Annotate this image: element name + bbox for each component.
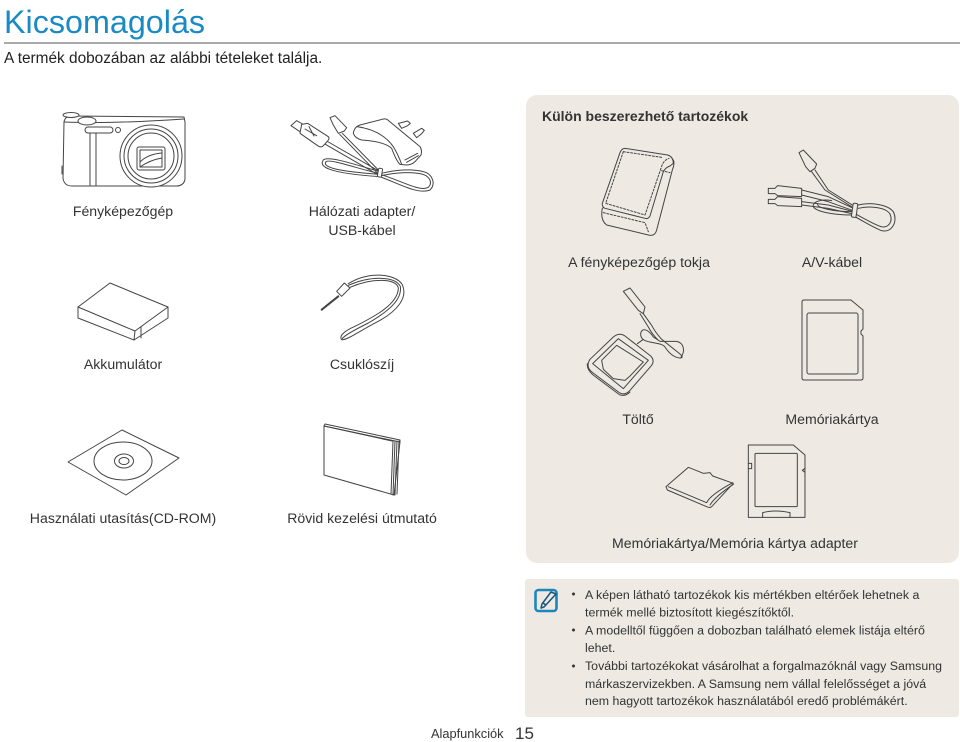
icon: wrist strap bbox=[322, 275, 404, 340]
icon: camera bbox=[62, 112, 185, 187]
title: Kicsomagolás bbox=[4, 4, 205, 40]
note text: További tartozékokat vásárolhat a forgalmazóknál vagy Samsung bbox=[585, 659, 942, 673]
icon: microSD card bbox=[666, 467, 733, 507]
label: wrist strap: Csuklószíj bbox=[330, 356, 394, 372]
icon: adapter and USB cable bbox=[291, 116, 433, 191]
note text: lehet. bbox=[585, 641, 615, 655]
icon: SD adapter bbox=[748, 445, 805, 517]
icon: camera case bbox=[602, 148, 674, 235]
note text: A modelltől függően a dobozban található elemek listája eltérő bbox=[585, 624, 925, 638]
label: A/V cable: A/V-kábel bbox=[802, 254, 862, 270]
label: memory card: Memóriakártya bbox=[785, 411, 879, 427]
panel: note bbox=[525, 579, 959, 717]
icon: battery bbox=[78, 283, 168, 340]
note text: A képen látható tartozékok kis mértékben eltérőek lehetnek a bbox=[585, 588, 919, 602]
panel: optional accessories bbox=[526, 95, 959, 563]
label: camera: Fényképezőgép bbox=[73, 203, 173, 219]
note text: nem hagyott tartozékok használatából eredő problémákért. bbox=[585, 694, 908, 708]
label: quick guide: Rövid kezelési útmutató bbox=[287, 510, 437, 526]
label: CD-ROM manual: Használati utasítás(CD-ROM) bbox=[30, 510, 216, 526]
icon: memory card bbox=[802, 300, 863, 380]
panel heading: Külön beszerezhető tartozékok bbox=[542, 108, 748, 124]
label: adapter line 1: Hálózati adapter/ bbox=[309, 203, 415, 219]
label: adapter line 2: USB-kábel bbox=[328, 222, 396, 238]
label: charger: Töltő bbox=[622, 411, 654, 427]
icon: CD-ROM bbox=[68, 430, 179, 495]
icon: note pencil bbox=[536, 590, 556, 611]
icon: quick guide booklet bbox=[324, 424, 400, 495]
note text: termék mellé biztosított kiegészítőktől. bbox=[585, 606, 794, 620]
subtitle: A termék dobozában az alábbi tételeket találja. bbox=[4, 50, 322, 67]
icon: charger bbox=[587, 288, 683, 395]
footer section name: Alapfunkciók bbox=[431, 726, 504, 741]
note text bbox=[572, 588, 942, 708]
icon: A/V cable bbox=[768, 150, 895, 231]
note text: márkaszervizekben. A Samsung nem vállal felelősséget a jóvá bbox=[585, 677, 926, 691]
label: battery: Akkumulátor bbox=[84, 356, 162, 372]
label: camera case: A fényképezőgép tokja bbox=[568, 254, 710, 270]
label: memory card and adapter: Memóriakártya/Memória kártya adapter bbox=[612, 535, 858, 551]
